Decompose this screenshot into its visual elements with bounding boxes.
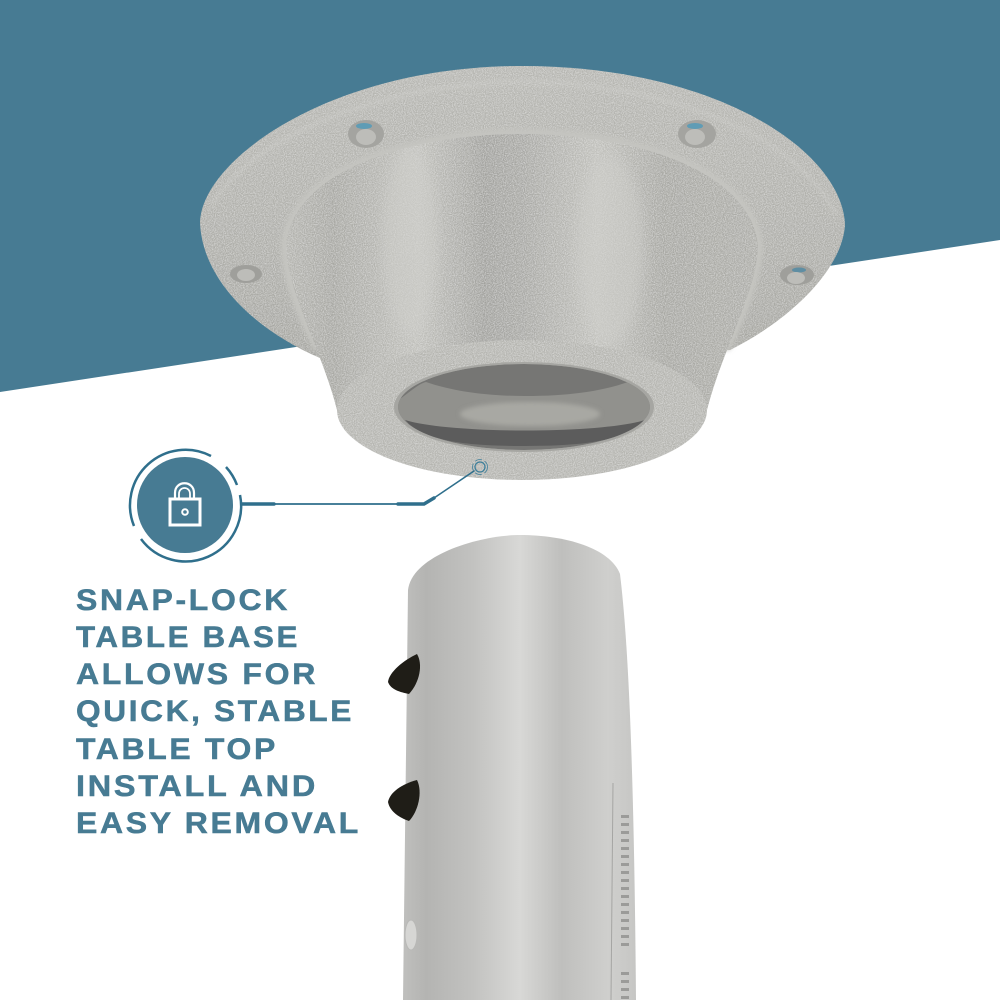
feature text: INSTALL AND [76, 770, 318, 803]
icon: padlock [170, 483, 200, 525]
flange plate [200, 66, 845, 358]
inner ledge [396, 382, 652, 433]
target marker [472, 460, 488, 474]
mounting hole: left [230, 265, 262, 283]
ring opening [394, 362, 654, 452]
label print [621, 815, 629, 1000]
mounting hole: top left [348, 120, 384, 148]
ledge shadow [405, 420, 645, 446]
mounting hole: top right [678, 120, 716, 148]
product photo: table base flange and cone [200, 66, 845, 480]
icon disc [137, 457, 233, 553]
feature text: QUICK, STABLE [76, 695, 354, 728]
leader line [242, 471, 474, 504]
snap button upper [388, 654, 420, 694]
feature text: SNAP-LOCK [76, 584, 290, 617]
feature text: EASY REMOVAL [76, 807, 361, 840]
label edge [611, 783, 613, 1000]
ledge highlight [460, 402, 600, 426]
feature text: TABLE TOP [76, 733, 278, 766]
callout: lock icon with leader line [130, 450, 488, 561]
bottom ring [337, 340, 707, 480]
cone shoulder [281, 129, 763, 350]
teal diagonal background [0, 0, 1000, 392]
cone body [286, 134, 758, 410]
feature text [76, 584, 361, 840]
snap button lower [388, 780, 420, 821]
product photo: pedestal tube [388, 535, 636, 1000]
feature text: ALLOWS FOR [76, 658, 318, 691]
rivet [405, 920, 417, 950]
flange rim highlight [212, 82, 836, 215]
feature text: TABLE BASE [76, 621, 300, 654]
soft sheen [384, 156, 644, 338]
interior of the socket [396, 364, 652, 450]
tube body [403, 535, 636, 1000]
dashed outer ring [130, 450, 241, 561]
mounting hole: right [780, 265, 814, 285]
